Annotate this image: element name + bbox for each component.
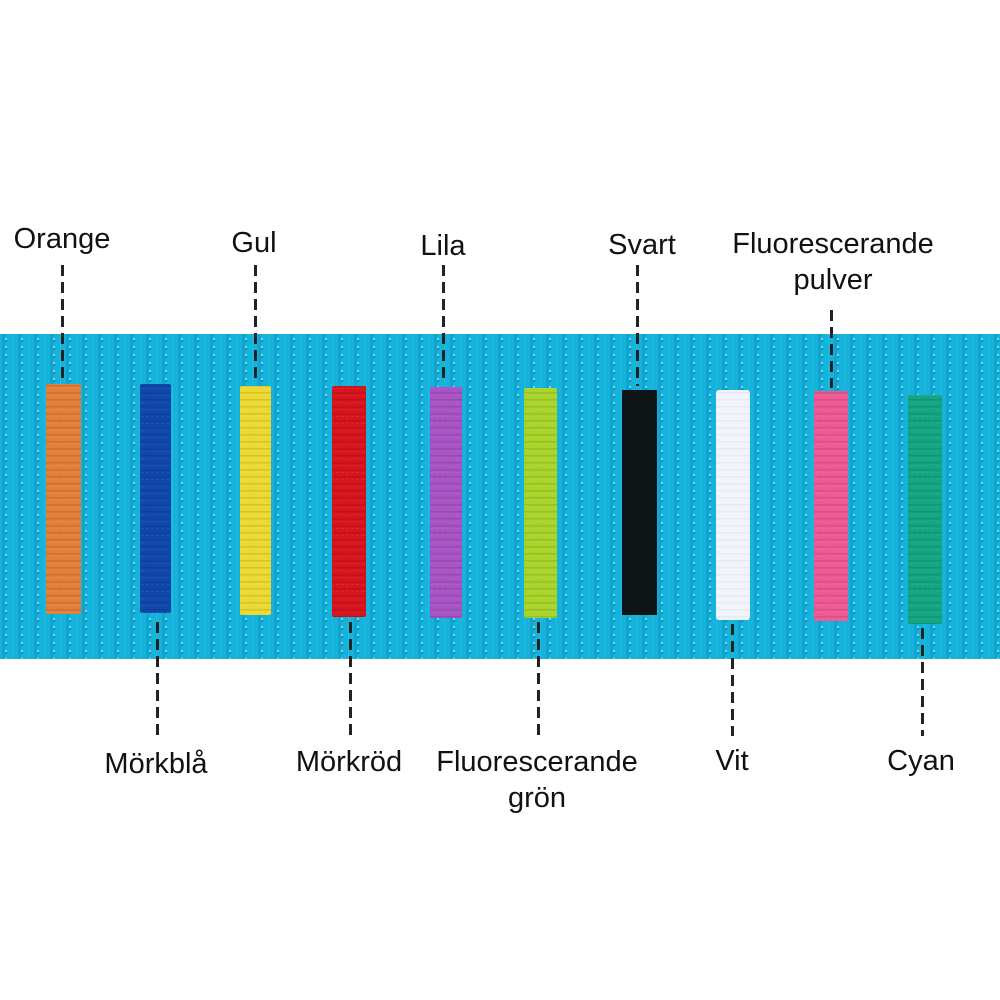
label: Vit: Vit [715,745,749,777]
stitched bar: black [622,390,657,615]
stitched bar: dark red [332,386,366,617]
stitched bar: dark blue [140,384,171,613]
stitched bar: fluorescent green [524,388,557,618]
label: Mörkröd: Mörkröd [296,746,402,778]
label: Fluorescerande grön: grön [508,782,566,814]
stitched bar: cyan [908,395,942,624]
label: Fluorescerande grön [436,622,638,814]
label: Orange: Orange [14,223,110,255]
stitched bar: white [716,390,750,620]
label: Fluorescerande grön: Fluorescerande [436,746,638,778]
label: Mörkblå: Mörkblå [104,748,208,780]
label: Gul: Gul [231,227,277,259]
label: Lila: Lila [420,230,466,262]
stitched bar: orange [46,384,81,614]
stitched bar: fluorescent pink [814,391,848,621]
stitched bar: yellow [240,386,271,615]
label: Fluorescerande pulver [732,228,934,388]
label: Fluorescerande pulver: Fluorescerande [732,228,934,260]
label: Fluorescerande pulver: pulver [794,264,873,296]
label: Svart: Svart [608,229,676,261]
panel: blue ribbon [0,334,1000,659]
label: Cyan: Cyan [887,745,955,777]
stitched bar: purple [430,387,462,618]
